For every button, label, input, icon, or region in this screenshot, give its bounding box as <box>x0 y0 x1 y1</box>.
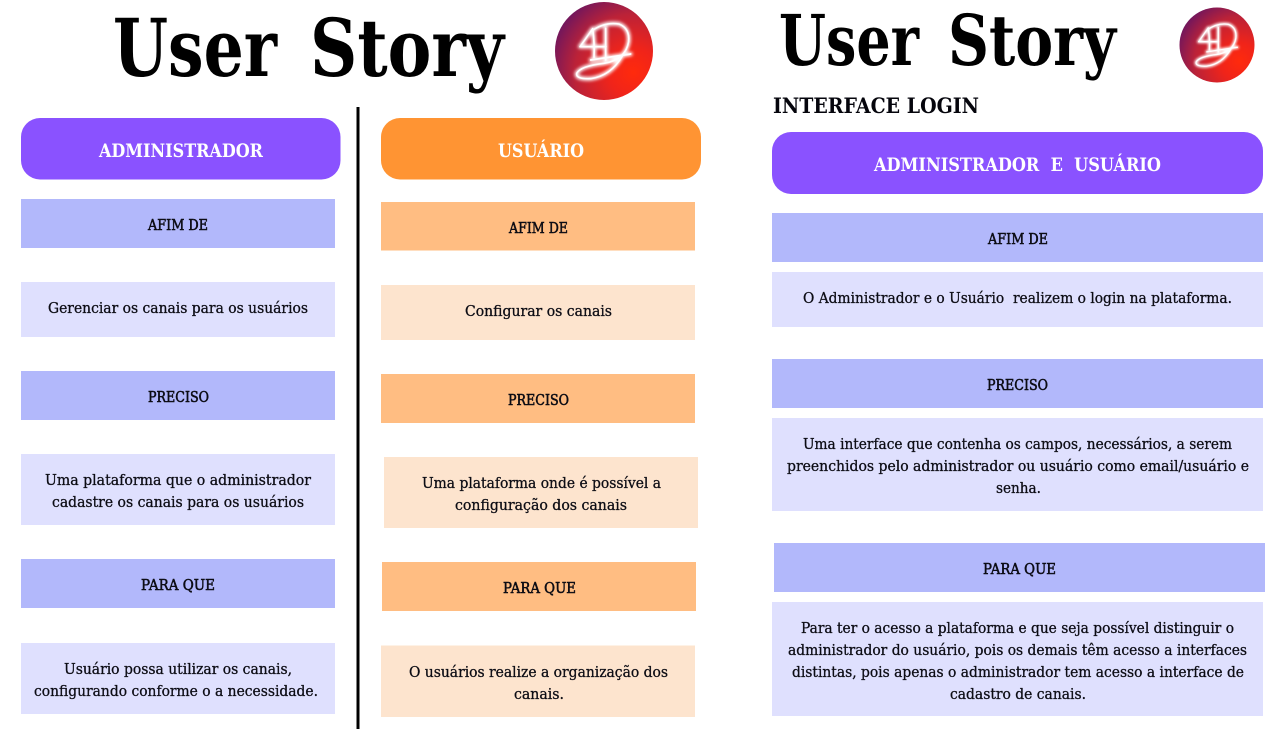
icon: logo right <box>1180 8 1254 82</box>
text block: para que: administrador do usuário, pois os demais têm acesso a interfaces <box>788 643 1247 659</box>
text block: preciso: Uma interface que contenha os campos, necessários, a serem <box>803 437 1232 453</box>
text block: para que: O usuários realize a organização dos <box>409 665 668 681</box>
text block: afim de: O Administrador e o Usuário realizem o login na plataforma. <box>803 291 1232 307</box>
heading: usuário <box>381 118 701 180</box>
panel: usuário <box>381 118 701 717</box>
title: left User Story: Story <box>310 1 506 95</box>
label: afim de: AFIM DE <box>147 218 208 234</box>
label: para que <box>21 559 335 608</box>
title: right User Story: Story <box>948 0 1118 82</box>
title: left User Story: User <box>113 1 278 95</box>
label: preciso <box>772 359 1263 408</box>
label: preciso: PRECISO <box>148 390 209 406</box>
text block: afim de: Gerenciar os canais para os usuários <box>48 301 308 317</box>
title: left User Story <box>113 1 506 95</box>
text block: preciso <box>772 418 1263 511</box>
label: preciso: PRECISO <box>508 393 569 409</box>
text block: afim de <box>772 272 1263 327</box>
label: afim de: AFIM DE <box>987 232 1048 248</box>
text block: para que <box>21 643 335 714</box>
label: preciso: PRECISO <box>987 378 1048 394</box>
text block: preciso: Uma plataforma que o administrador <box>45 473 311 489</box>
icon: logo left <box>555 2 653 100</box>
text block: para que: Para ter o acesso a plataforma e que seja possível distinguir o <box>801 621 1234 637</box>
label: para que: PARA QUE <box>503 581 576 597</box>
label: para que <box>774 543 1265 592</box>
text block: para que: Usuário possa utilizar os canais, <box>64 662 292 678</box>
label: para que: PARA QUE <box>141 578 215 594</box>
text block: para que: canais. <box>514 687 564 703</box>
label: preciso <box>381 374 695 423</box>
heading: usuário: USUÁRIO <box>498 139 584 162</box>
label: afim de <box>21 199 335 248</box>
text block: para que: configurando conforme o a necessidade. <box>34 684 318 700</box>
heading: administrador e usuário: ADMINISTRADOR E USUÁRIO <box>873 153 1161 176</box>
text block: preciso <box>384 457 698 528</box>
label: afim de: AFIM DE <box>508 221 568 237</box>
text block: para que <box>772 602 1263 716</box>
text block: afim de <box>21 282 335 337</box>
text block: preciso <box>21 454 335 525</box>
text block: preciso: configuração dos canais <box>455 498 627 514</box>
title: right User Story: User <box>779 0 920 82</box>
text block: para que: cadastro de canais. <box>950 687 1086 703</box>
label: afim de <box>381 202 695 250</box>
title: right User Story <box>779 0 1118 82</box>
divider: vertical line <box>356 107 360 729</box>
text block: preciso: preenchidos pelo administrador ou usuário como email/usuário e <box>787 459 1249 475</box>
heading: administrador e usuário <box>772 132 1263 194</box>
label: para que: PARA QUE <box>983 562 1056 578</box>
heading: administrador <box>21 118 340 180</box>
text block: preciso: Uma plataforma onde é possível a <box>422 476 661 492</box>
text block: preciso: senha. <box>996 481 1041 497</box>
label: para que <box>382 562 696 611</box>
label: preciso <box>21 371 335 420</box>
text block: afim de: Configurar os canais <box>465 304 612 320</box>
panel: administrador e usuário <box>772 132 1265 716</box>
heading: interface login: INTERFACE LOGIN <box>773 93 979 118</box>
text block: para que: distintas, pois apenas o administrador tem acesso a interface de <box>792 665 1244 681</box>
text block: preciso: cadastre os canais para os usuários <box>52 495 304 511</box>
text block: afim de <box>381 285 695 340</box>
label: afim de <box>772 213 1263 262</box>
panel: administrador <box>21 118 340 714</box>
heading: administrador: ADMINISTRADOR <box>98 140 263 162</box>
text block: para que <box>381 646 695 717</box>
